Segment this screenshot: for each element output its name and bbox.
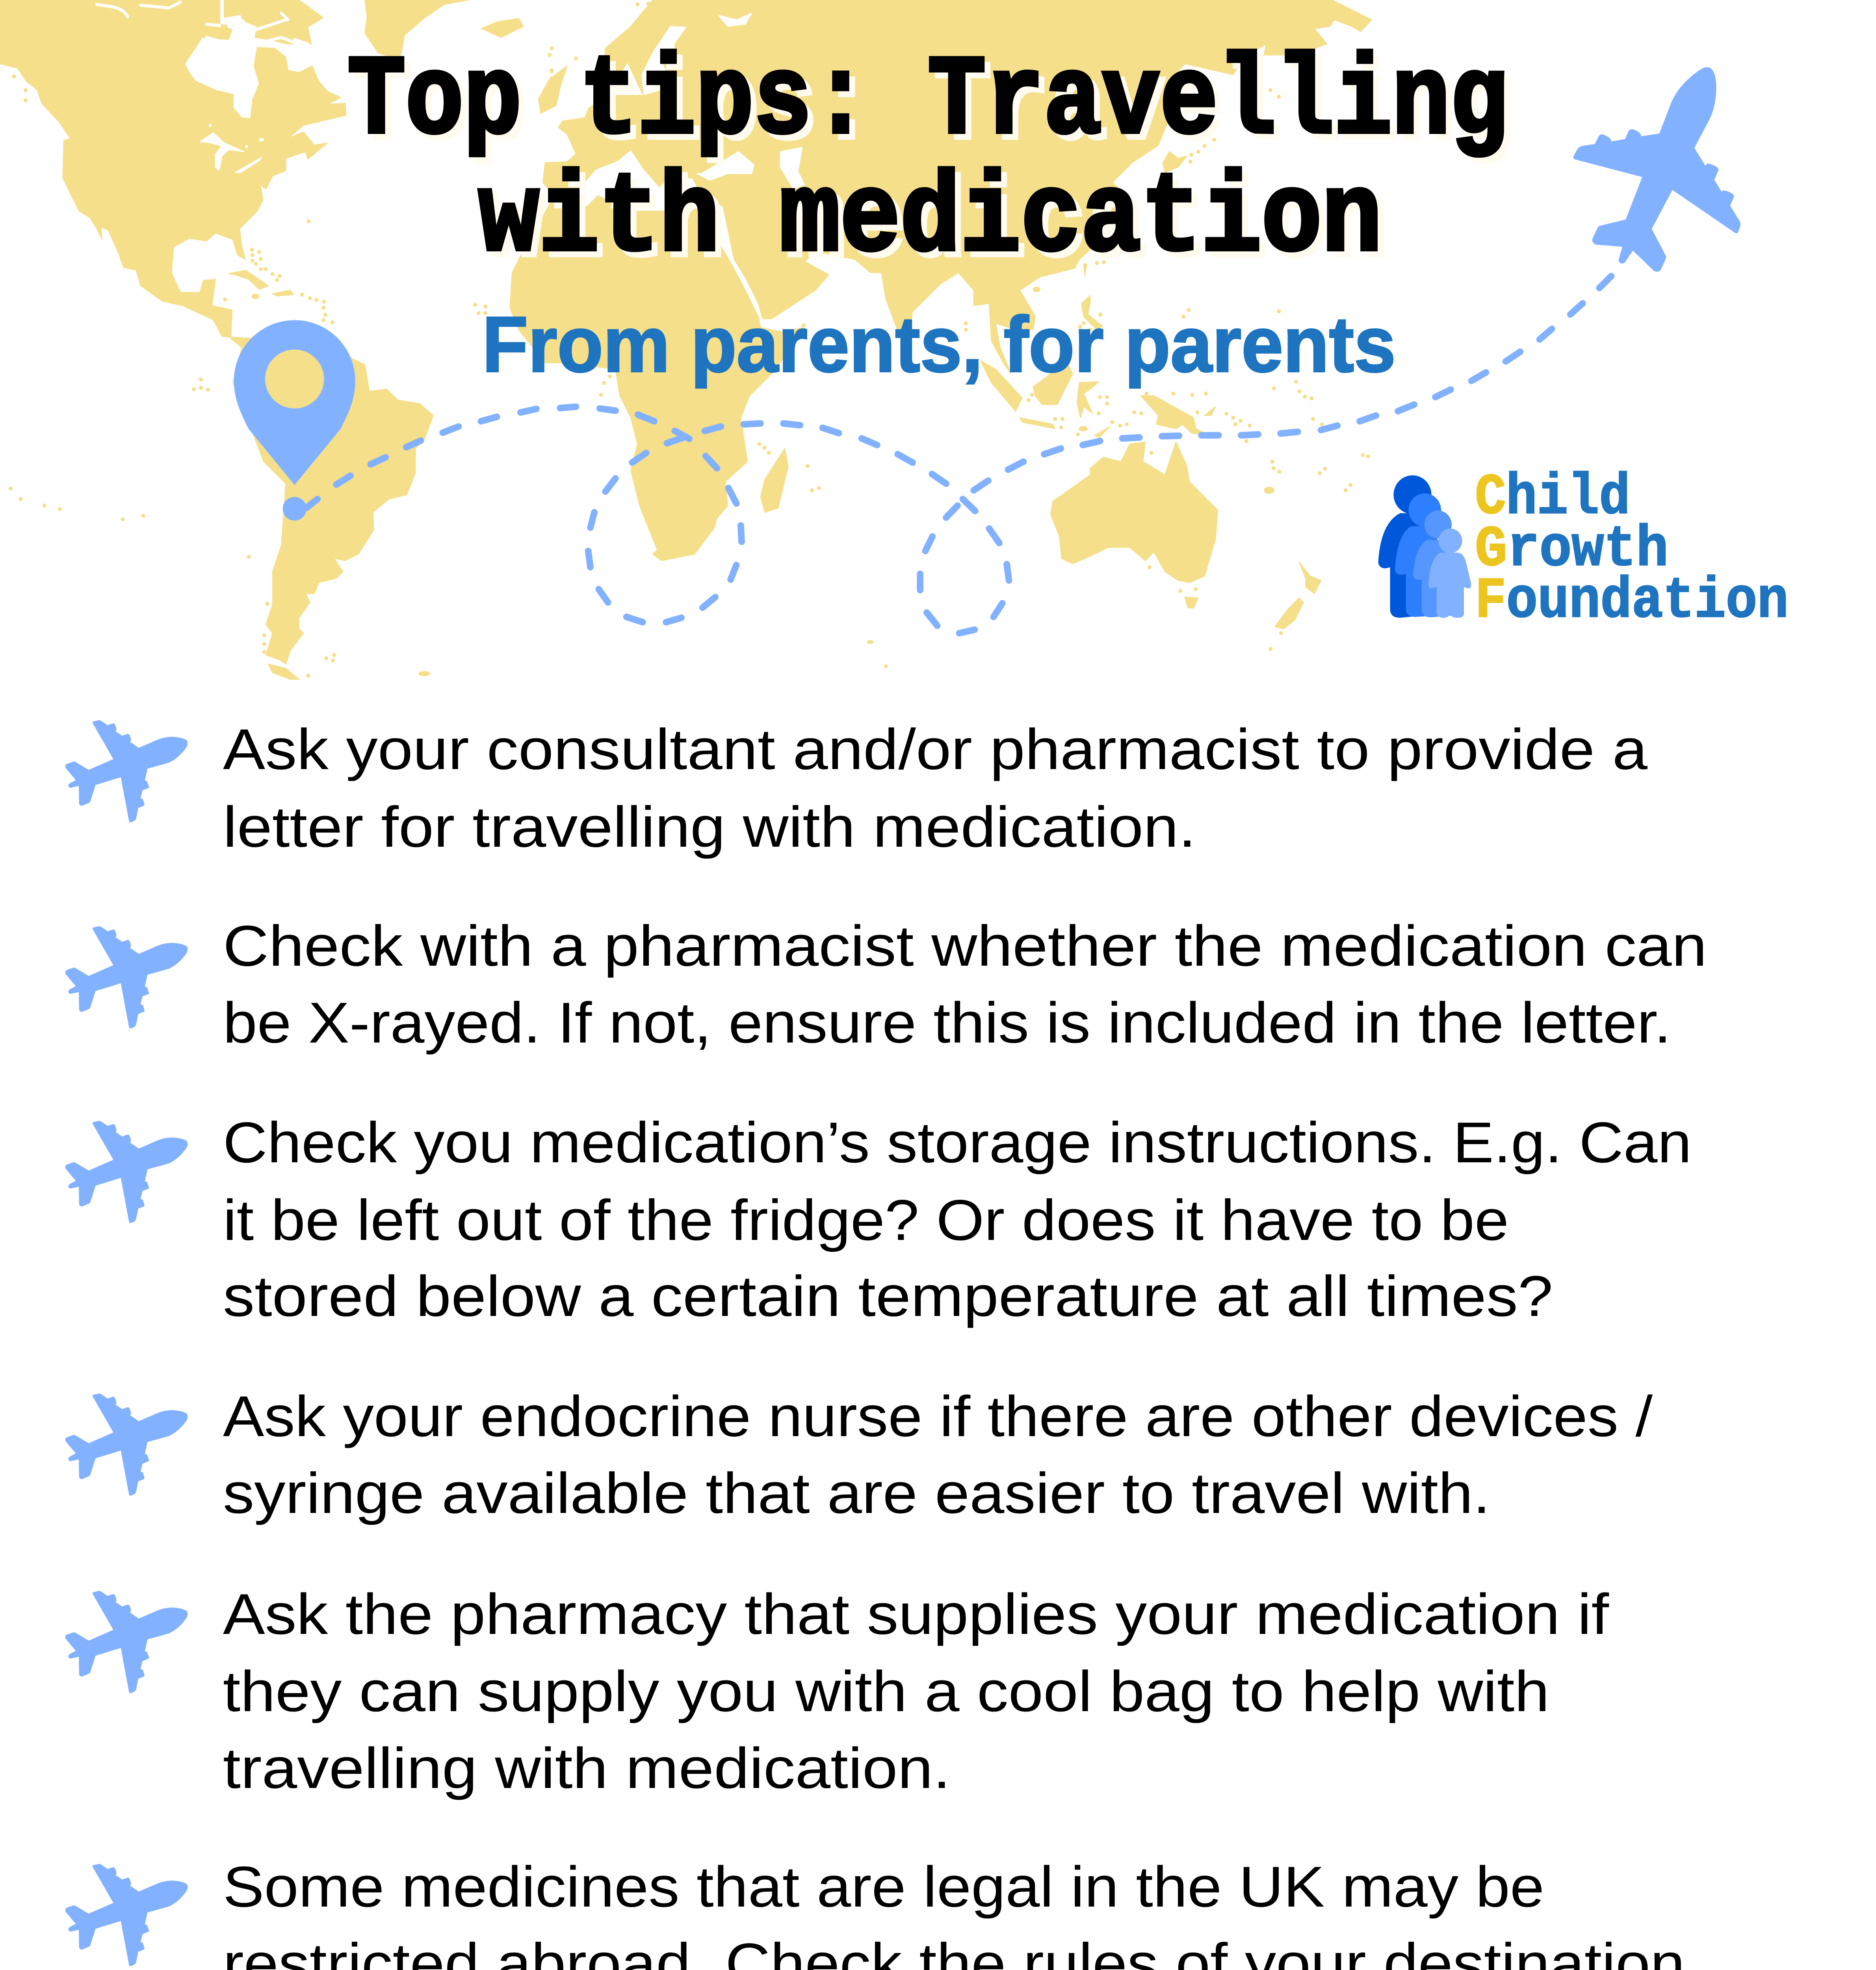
icon: aeroplane bullet: [65, 720, 188, 822]
logo wordmark: Foundation: [1475, 569, 1789, 634]
logo: Child Growth Foundation: [1378, 465, 1789, 634]
tip 5: they can supply you with a cool bag to help with: [223, 1659, 1549, 1723]
tip 6: [65, 1855, 1685, 1970]
tip 3: stored below a certain temperature at all times?: [223, 1264, 1553, 1328]
tip 3: Check you medication’s storage instructions. E.g. Can: [223, 1110, 1692, 1175]
icon: large aeroplane: [1573, 67, 1740, 272]
tip 6: Some medicines that are legal in the UK may be: [223, 1855, 1544, 1919]
tip 4: Ask your endocrine nurse if there are other devices /: [223, 1384, 1653, 1448]
icon: aeroplane bullet: [65, 1121, 188, 1223]
tip 4: syringe available that are easier to travel with.: [223, 1461, 1490, 1525]
map: Eurasia and Africa: [510, 0, 1372, 666]
icon: aeroplane bullet: [65, 1591, 188, 1693]
logo icon: family figures: [1378, 475, 1471, 618]
tip 1: [65, 717, 1648, 859]
title: Top tips: Travelling: [347, 39, 1508, 166]
title: Top tips: Travelling: [353, 45, 1514, 172]
logo wordmark: Child: [1475, 465, 1630, 530]
subtitle: From parents, for parents: [482, 301, 1396, 388]
tip 2: Check with a pharmacist whether the medication can: [223, 914, 1707, 978]
dashed flight path: [306, 276, 1611, 633]
title: [347, 39, 1514, 289]
tip 3: [65, 1110, 1692, 1328]
tip 4: [65, 1384, 1653, 1525]
icon: aeroplane bullet: [65, 1864, 188, 1966]
icon: aeroplane bullet: [65, 1394, 188, 1496]
tip 2: be X-rayed. If not, ensure this is included in the letter.: [223, 991, 1671, 1055]
world map background: [0, 0, 1372, 679]
tip 2: [65, 914, 1707, 1055]
icon: location pin: [234, 320, 355, 520]
map: Americas and Greenland: [0, 0, 610, 679]
logo wordmark: Growth: [1475, 517, 1668, 582]
tip 3: it be left out of the fridge? Or does it have to be: [223, 1188, 1509, 1252]
tip 5: Ask the pharmacy that supplies your medication if: [223, 1582, 1609, 1646]
icon: aeroplane bullet: [65, 926, 188, 1028]
tip 1: letter for travelling with medication.: [223, 795, 1196, 859]
logo wordmark: [1475, 465, 1789, 634]
title: with medication: [479, 156, 1382, 283]
tip 5: [65, 1582, 1609, 1800]
tip 1: Ask your consultant and/or pharmacist to provide a: [223, 717, 1648, 781]
title: with medication: [485, 162, 1388, 289]
map: Asia-Pacific and Oceania: [1029, 90, 1368, 649]
tip 5: travelling with medication.: [223, 1736, 951, 1800]
